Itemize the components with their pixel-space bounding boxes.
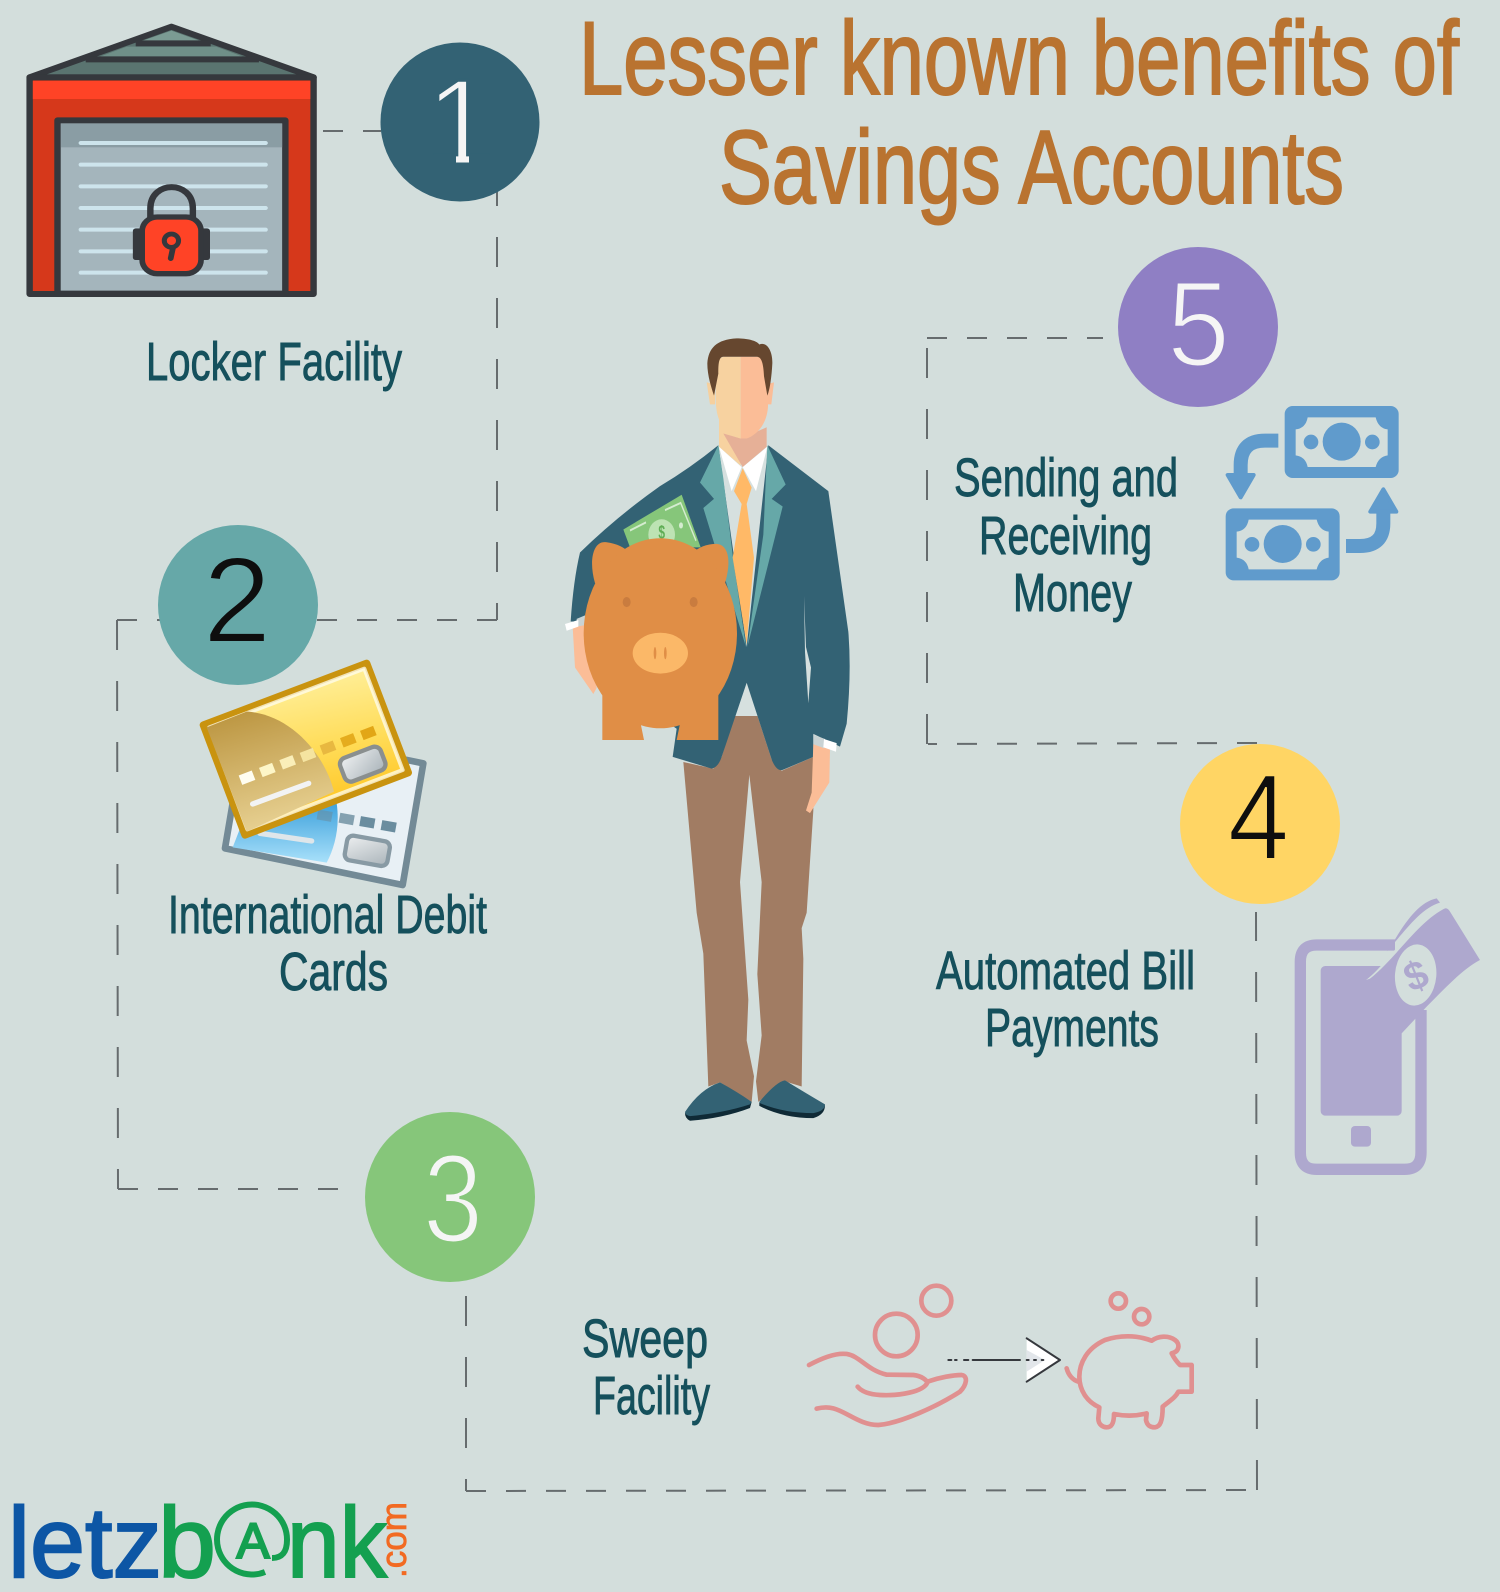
label: International Debit Cards: International Debit [168,885,487,945]
label: Locker Facility: Locker Facility [146,332,402,392]
man: lapels [700,445,786,647]
man: jacket fold [804,596,811,703]
arrow: up-right [1346,489,1396,546]
banknote: $ [658,523,665,543]
label: Automated Bill Payments: Payments [985,998,1159,1058]
badge 1: 1 [426,54,494,190]
label: International Debit Cards: Cards [279,942,388,1002]
badge 5: 5 [1167,256,1230,392]
man: shoes [685,1080,825,1121]
icon: debit cards [203,663,423,885]
man: jacket [571,445,850,770]
label: Automated Bill Payments [936,941,1195,1058]
banknote [623,495,701,550]
icon: padlock [133,187,210,274]
label: International Debit Cards [168,885,487,1002]
logo: letzbank.com: A [236,1513,270,1569]
piggy bank [584,538,737,740]
label: Sweep Facility: Facility [593,1366,710,1426]
badge 3 [365,1112,535,1282]
icon: bill top [1285,406,1399,478]
man: collar [719,447,767,491]
icon: phone with bill: $ [1398,952,1435,1001]
man: tie [733,468,754,644]
icon: bill bottom [1226,508,1340,580]
logo: letzbank.com [8,1487,414,1592]
label: Sending and Receiving Money: Sending and [954,448,1178,508]
logo: letzbank.com: .com [373,1502,414,1578]
man: face [716,357,768,439]
icon: locker garage [30,27,314,294]
arrow [948,1338,1060,1382]
arrow: down-left [1228,441,1278,497]
badge 4: 4 [1228,749,1289,885]
badge 5 [1118,247,1278,407]
label: Sending and Receiving Money: Receiving [979,506,1152,566]
badge 2: 2 [203,532,271,668]
label: Automated Bill Payments: Automated Bill [936,941,1195,1001]
man: cuffs and hands [565,615,837,813]
badge 4 [1180,744,1340,904]
illustration: man holding piggy bank [565,338,850,1121]
icon: hand with coins [809,1286,966,1425]
man: ears [707,382,774,404]
icon: phone with bill [1300,898,1480,1169]
man: shirt [719,447,767,716]
label: Sending and Receiving Money [954,448,1178,623]
badge 1 [380,42,540,202]
icon: sweep hand, arrow and piggy [809,1286,1192,1427]
icon: money transfer [1226,406,1399,580]
badge 3: 3 [423,1130,483,1269]
man: neck [719,417,767,467]
man: trousers [683,713,813,1102]
man: hair [707,338,772,396]
title [579,1,1460,226]
label: Sending and Receiving Money: Money [1013,563,1132,623]
label: Sweep Facility [582,1309,710,1426]
badge 2 [158,525,318,685]
label: Sweep Facility: Sweep [582,1309,708,1369]
icon: outline piggy bank [1067,1293,1192,1427]
